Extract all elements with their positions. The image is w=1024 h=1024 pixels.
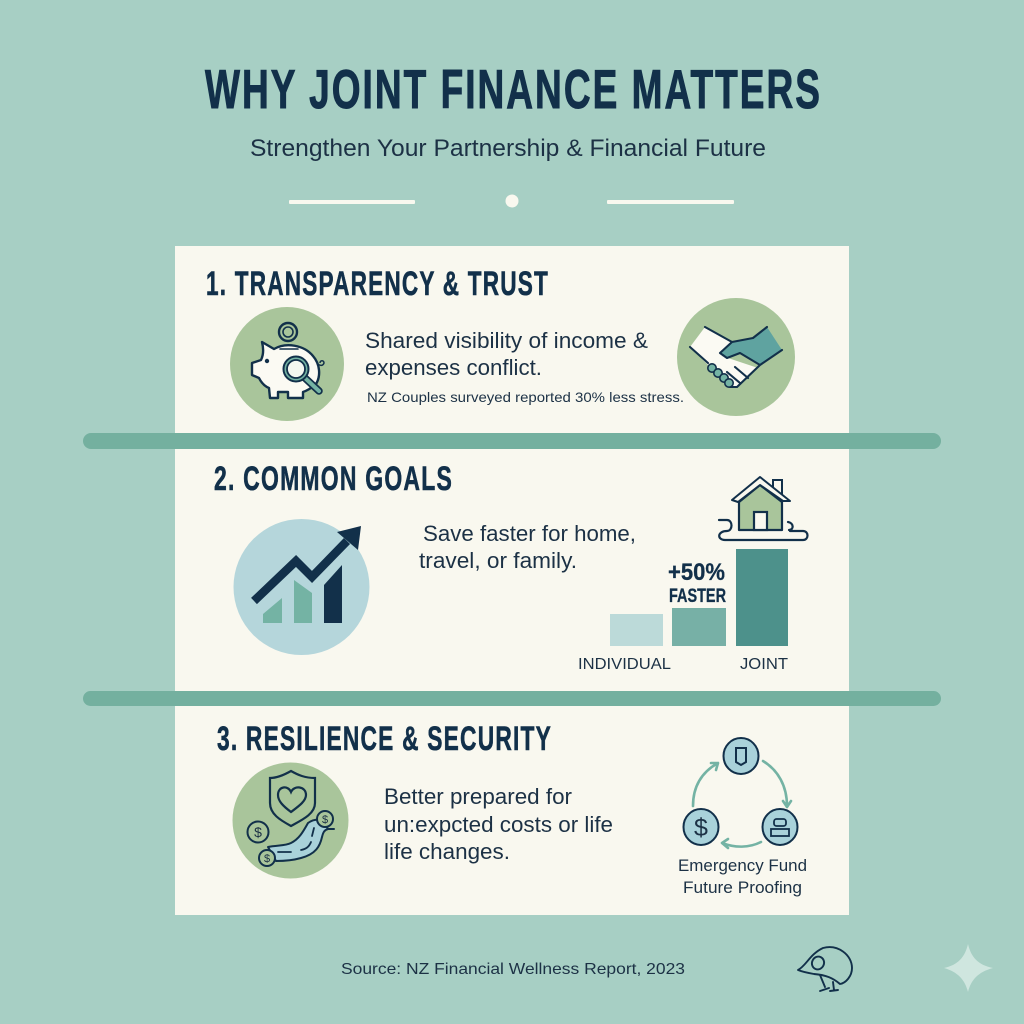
coin: $ — [264, 853, 270, 865]
heading 2: 2. COMMON GOALS — [214, 460, 453, 498]
bar: middle — [672, 608, 726, 646]
diagram: emergency fund cycle — [678, 738, 807, 897]
label: joint: JOINT — [740, 656, 788, 673]
stat note: NZ Couples surveyed reported 30% less stress. — [367, 389, 684, 405]
text: shared visibility — [365, 328, 648, 380]
divider 1 — [83, 433, 941, 449]
icon: handshake — [677, 298, 795, 416]
cycle arrows — [693, 761, 791, 848]
heading 1: 1. TRANSPARENCY & TRUST — [206, 265, 549, 303]
text: better prepared: un:expcted costs or life — [384, 812, 613, 837]
coin: $ — [254, 824, 262, 840]
icon: sparkle — [944, 944, 993, 992]
text: better prepared: Better prepared for — [384, 784, 572, 809]
bar chart — [578, 549, 788, 673]
text: save faster: travel, or family. — [419, 548, 577, 573]
bar: individual — [610, 614, 663, 646]
icon: shield and winding road — [232, 762, 348, 878]
text: shared visibility: Shared visibility of income & — [365, 328, 648, 353]
text: better prepared: life changes. — [384, 839, 510, 864]
bar: joint — [736, 549, 788, 646]
text: save faster: Save faster for home, — [423, 521, 636, 546]
cycle node: dollar: $ — [694, 814, 708, 842]
text: shared visibility: expenses conflict. — [365, 355, 542, 380]
coin: $ — [322, 814, 328, 826]
section 3: resilience and security — [217, 720, 807, 897]
subtitle: Strengthen Your Partnership & Financial Future — [250, 135, 766, 162]
divider 2 — [83, 691, 941, 706]
callout: +50% faster — [668, 559, 726, 607]
icon: kiwi bird — [798, 947, 852, 991]
section 2: common goals — [214, 460, 808, 673]
label: emergency fund: Emergency Fund — [678, 856, 807, 875]
text: save faster — [419, 521, 636, 573]
icon: house — [719, 477, 808, 540]
text: better prepared — [384, 784, 613, 864]
cycle node: dollar — [684, 809, 718, 845]
header ornament — [289, 194, 734, 208]
callout: +50% faster: FASTER — [669, 586, 726, 607]
icon: growth chart — [234, 519, 370, 655]
label: emergency fund — [678, 856, 807, 897]
icon: piggy bank with magnifier — [230, 307, 344, 421]
callout: +50% faster: +50% — [668, 559, 725, 586]
label: individual: INDIVIDUAL — [578, 656, 671, 673]
source: Source: NZ Financial Wellness Report, 2023 — [341, 961, 685, 978]
section 1: transparency and trust — [206, 265, 795, 421]
cycle node: savings — [762, 809, 798, 845]
cycle node: document — [724, 738, 758, 774]
main panel — [175, 246, 849, 915]
heading 3: 3. RESILIENCE & SECURITY — [217, 720, 552, 758]
label: emergency fund: Future Proofing — [683, 878, 802, 897]
